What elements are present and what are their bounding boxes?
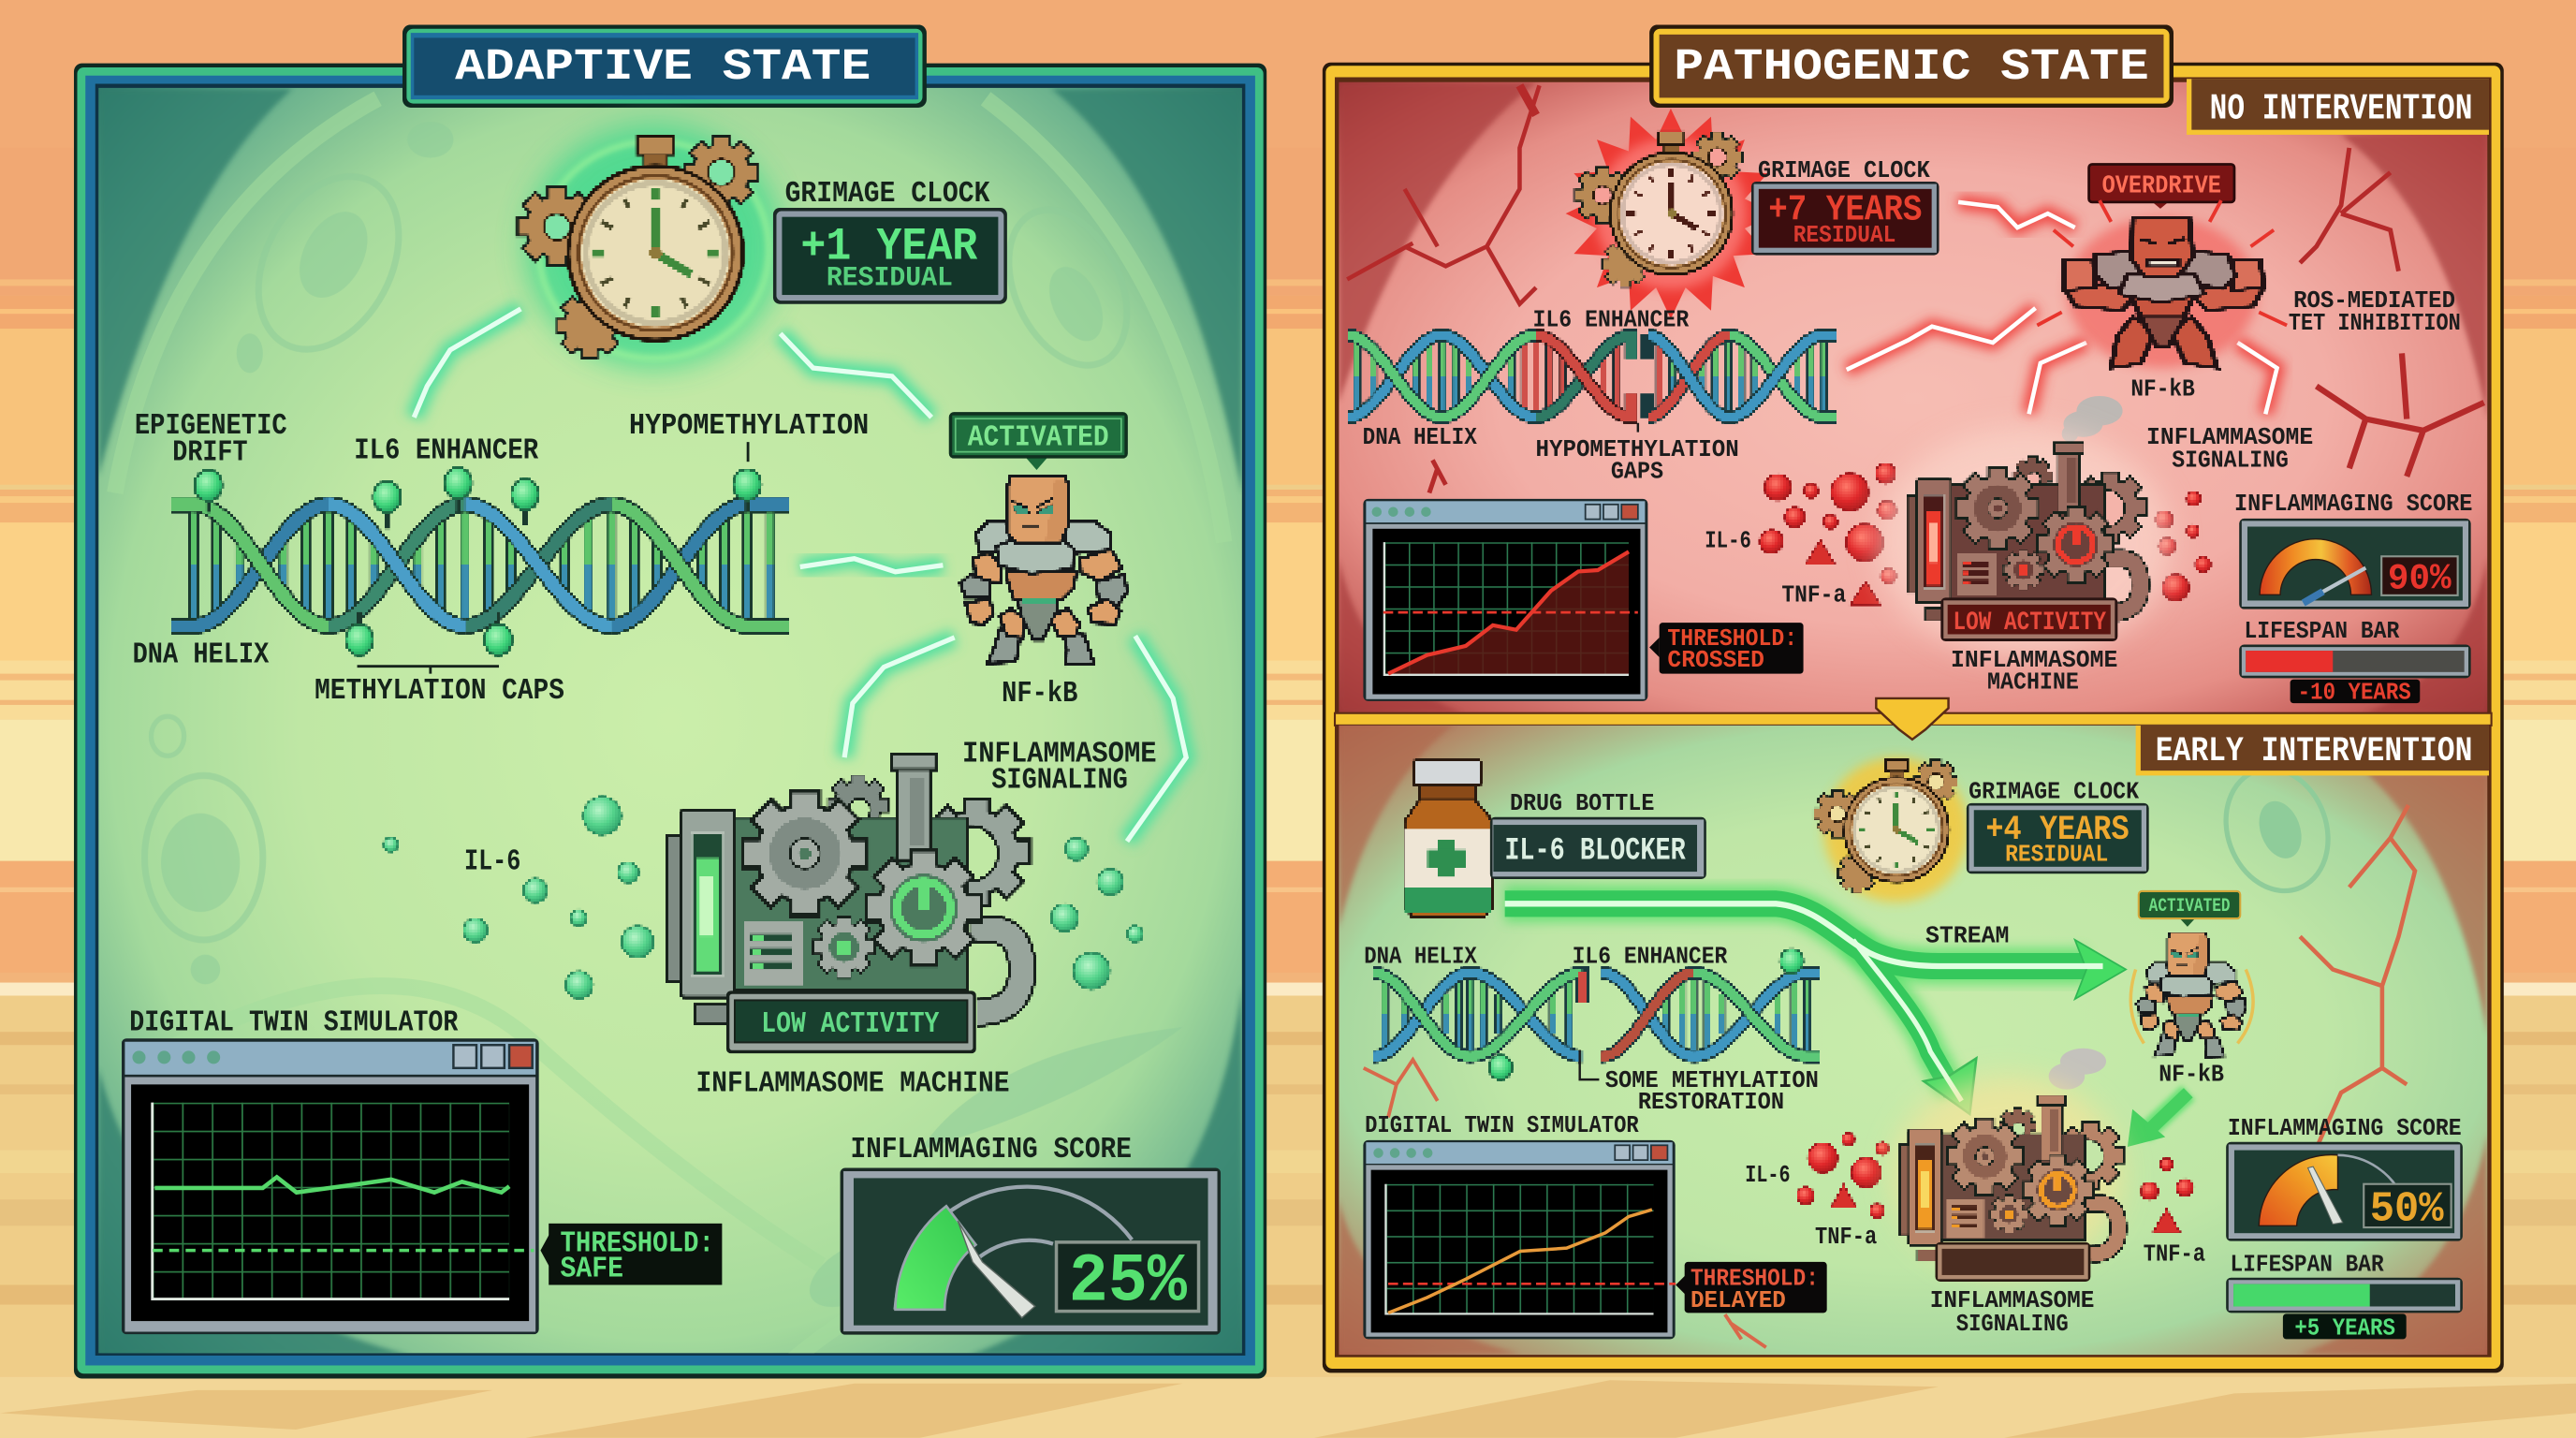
callout: overdrive <box>2089 165 2234 209</box>
chart: DNA helix with hypomethylation gap <box>1347 335 1837 418</box>
label: inflammasome signaling <box>1930 1286 2094 1338</box>
chart: DNA helix with partial restoration <box>1373 949 1821 1079</box>
callout: activated: ACTIVATED <box>968 422 1109 455</box>
callout: threshold delayed: THRESHOLD: <box>1690 1264 1819 1292</box>
label: TNF-a: TNF-a <box>1781 580 1846 609</box>
cytokines: red IL-6 and TNF-a particles <box>1760 463 2211 605</box>
labels: epigenetic drift: DRIFT <box>172 436 248 469</box>
label: some methylation restoration: RESTORATION <box>1638 1088 1784 1116</box>
background: membrane folds <box>98 89 1242 1364</box>
label: DNA helix: DNA HELIX <box>1363 423 1477 451</box>
panel frame <box>1323 63 2504 1372</box>
tab: no intervention: NO INTERVENTION <box>2210 88 2472 129</box>
label: IL-6: IL-6 <box>1705 526 1751 554</box>
label: ROS-mediated TET inhibition <box>2289 286 2461 337</box>
gauge: inflammaging score 90%: 90% <box>2388 558 2452 599</box>
callout: activated <box>2139 891 2240 927</box>
badge: +1 year residual <box>773 208 1007 304</box>
divider <box>1335 713 2492 726</box>
tab: early intervention: EARLY INTERVENTION <box>2156 732 2472 771</box>
machine: inflammasome overactive <box>1876 427 2172 657</box>
callout: threshold delayed: DELAYED <box>1690 1286 1786 1314</box>
callout: threshold crossed: CROSSED <box>1667 646 1764 674</box>
status plate: low activity: LOW ACTIVITY <box>761 1008 940 1041</box>
label: inflammasome signaling: SIGNALING <box>991 765 1128 798</box>
callout: plus 5 years: +5 YEARS <box>2294 1314 2395 1343</box>
label: inflammasome signaling <box>2146 423 2313 474</box>
label: DNA helix: DNA HELIX <box>133 638 269 671</box>
bar: lifespan minus 10 years <box>2239 645 2471 678</box>
label: DNA helix: DNA HELIX <box>1364 942 1477 970</box>
sub-panel: early intervention <box>1339 725 2489 1355</box>
badge: +4 years residual: +4 YEARS <box>1985 811 2130 850</box>
badge: +7 years residual: RESIDUAL <box>1793 221 1895 249</box>
arrow: energy spark clock to NF-kB <box>781 333 931 418</box>
callout: threshold delayed <box>1676 1262 1827 1314</box>
icon: steam <box>2049 1049 2106 1090</box>
helix strands <box>1373 973 1821 1057</box>
status plate: low activity <box>726 990 976 1053</box>
callout: minus 10 years: -10 YEARS <box>2298 678 2411 706</box>
label: inflammaging score: INFLAMMAGING SCORE <box>2228 1114 2462 1142</box>
callout: activated <box>949 412 1128 470</box>
badge: IL-6 blocker: IL-6 BLOCKER <box>1504 833 1686 869</box>
arrow: drug stream to NF-kB and machine <box>1505 903 2126 1114</box>
tab: early intervention <box>2136 726 2489 775</box>
cytokines: green IL-6 particles <box>384 797 1143 998</box>
methylation caps <box>1489 949 1803 1079</box>
callout: threshold safe: THRESHOLD: <box>560 1228 714 1261</box>
gauge: inflammaging score 25%: 25% <box>1069 1243 1188 1321</box>
sub-panel background: inflamed tissue <box>1339 82 2487 713</box>
label: methylation caps: METHYLATION CAPS <box>315 675 564 708</box>
label: GrimAge clock: GRIMAGE CLOCK <box>1758 156 1930 184</box>
cytokines: reduced particles <box>1797 1133 2193 1232</box>
label: GrimAge clock: GRIMAGE CLOCK <box>785 178 989 211</box>
arrow: spark NF-kB to machine <box>2029 343 2086 414</box>
label: IL-6: IL-6 <box>464 845 520 878</box>
arrow: energy spark NF-kB to machine <box>844 638 955 757</box>
badge: +1 year residual: RESIDUAL <box>827 261 953 293</box>
label: TNF-a: TNF-a <box>2144 1240 2205 1269</box>
sub-panel: no intervention <box>1339 79 2489 713</box>
veins and cells <box>1364 755 2415 1347</box>
status plate: blank <box>1936 1242 2090 1282</box>
gauge: inflammaging score 50% <box>2226 1142 2463 1241</box>
icon: epigenetic clock <box>520 125 782 368</box>
sub-panel background: recovering tissue <box>1339 726 2487 1355</box>
label: TNF-a: TNF-a <box>1815 1223 1877 1251</box>
label: some methylation restoration: SOME METHYLATION <box>1605 1066 1819 1094</box>
gauge: inflammaging score 90% <box>2239 519 2471 609</box>
label: GrimAge clock: GRIMAGE CLOCK <box>1969 777 2139 805</box>
callout: threshold safe: SAFE <box>560 1254 623 1286</box>
arrow: spark clock to NF-kB <box>1958 202 2075 227</box>
helix strands: intact and broken <box>1347 335 1837 418</box>
helix front strands <box>171 505 788 626</box>
label: hypomethylation gaps <box>1535 423 1739 486</box>
label: inflammasome machine <box>1951 646 2117 696</box>
badge: +7 years residual <box>1751 182 1939 256</box>
background: tissue folds <box>1339 725 2487 1354</box>
badge: +1 year residual: +1 YEAR <box>800 220 978 272</box>
helix back strands <box>171 505 788 626</box>
arrow: spark inflammasome signaling <box>2237 343 2277 414</box>
panel background: cell interior <box>98 88 1242 1353</box>
status plate: low activity <box>1940 597 2117 641</box>
trend line: stable inflammation <box>154 1177 509 1193</box>
label: inflammaging score: INFLAMMAGING SCORE <box>2234 490 2472 518</box>
callout: activated: ACTIVATED <box>2149 896 2231 917</box>
label: digital twin simulator: DIGITAL TWIN SIMULATOR <box>1365 1111 1639 1139</box>
label: IL-6: IL-6 <box>1745 1161 1791 1189</box>
chart: digital twin window, safe <box>122 1038 539 1334</box>
label: inflammasome machine: INFLAMMASOME MACHINE <box>695 1067 1010 1100</box>
label: ROS-mediated TET inhibition: TET INHIBITION <box>2289 309 2461 337</box>
badge: +4 years residual: RESIDUAL <box>2005 841 2108 868</box>
machine: inflammasome low activity <box>667 755 1028 1053</box>
label: inflammasome signaling: INFLAMMASOME <box>1930 1286 2094 1314</box>
arrow: stream NF-kB to machine <box>2128 1093 2188 1147</box>
label: inflammasome signaling: INFLAMMASOME <box>962 738 1157 770</box>
trend line: delayed inflammation <box>1388 1210 1652 1313</box>
callout: threshold safe <box>540 1224 722 1286</box>
badge: +7 years residual: +7 YEARS <box>1768 190 1922 231</box>
callout: threshold crossed: THRESHOLD: <box>1667 624 1797 653</box>
trend line: rising inflammation <box>1388 551 1629 674</box>
label: NF-kB: NF-kB <box>1002 678 1077 711</box>
threshold line <box>1388 1283 1676 1284</box>
icon: slowed clock <box>1815 757 1969 902</box>
arrow: inflammasome signaling spark <box>1127 636 1186 842</box>
icon: accelerated clock <box>1566 109 1776 318</box>
labels: epigenetic drift: EPIGENETIC <box>135 410 287 443</box>
label: ROS-mediated TET inhibition: ROS-MEDIATED <box>2293 286 2455 315</box>
character: NF-kB overdrive <box>2037 200 2287 368</box>
label: inflammasome signaling: SIGNALING <box>1956 1310 2069 1338</box>
arrow: spark NF-kB to DNA <box>1847 308 2036 370</box>
machine: inflammasome slowed <box>1893 1077 2123 1282</box>
arrow: energy spark clock to DNA <box>414 309 520 418</box>
background cells <box>144 122 1183 1321</box>
label: inflammasome machine: INFLAMMASOME <box>1951 646 2117 674</box>
panel: pathogenic state <box>1323 24 2504 1372</box>
veins <box>1347 85 2484 493</box>
label: inflammaging score: INFLAMMAGING SCORE <box>850 1134 1132 1167</box>
banner: adaptive state: ADAPTIVE STATE <box>455 43 871 93</box>
arrow: progression marker <box>1876 698 1949 740</box>
gauge: inflammaging score 50%: 50% <box>2370 1184 2444 1233</box>
label: NF-kB: NF-kB <box>2130 374 2195 403</box>
gauge: inflammaging score 25% <box>841 1168 1221 1335</box>
label: inflammasome signaling: SIGNALING <box>2172 446 2289 474</box>
label: digital twin simulator: DIGITAL TWIN SIMULATOR <box>129 1006 458 1039</box>
chart: digital twin window, crossed <box>1363 499 1647 701</box>
callout: threshold crossed <box>1649 623 1804 674</box>
tab: no intervention <box>2187 79 2489 135</box>
callout: overdrive: OVERDRIVE <box>2102 171 2221 200</box>
label: hypomethylation gaps: GAPS <box>1611 458 1663 486</box>
label: IL6 enhancer: IL6 ENHANCER <box>1533 306 1689 334</box>
background: tissue folds <box>1339 82 2487 713</box>
chart: digital twin window, delayed <box>1363 1140 1676 1339</box>
label: inflammasome signaling: INFLAMMASOME <box>2146 423 2313 451</box>
label: inflammasome signaling <box>962 738 1157 798</box>
label: lifespan bar: LIFESPAN BAR <box>2244 617 2400 645</box>
label: IL6 enhancer: IL6 ENHANCER <box>1573 942 1727 970</box>
badge: +4 years residual <box>1967 803 2149 873</box>
label: stream: STREAM <box>1925 921 2009 949</box>
banner: adaptive state <box>402 24 927 108</box>
methylation caps <box>195 468 761 655</box>
bar: lifespan plus 5 years <box>2226 1278 2463 1313</box>
badge: IL-6 blocker <box>1490 817 1706 879</box>
threshold line <box>1383 611 1638 613</box>
panel frame <box>74 64 1266 1379</box>
threshold line <box>153 1250 534 1252</box>
icon: drug bottle <box>1405 760 1493 917</box>
label: hypomethylation gaps: HYPOMETHYLATION <box>1535 435 1739 463</box>
chart: DNA helix with methylation caps <box>171 468 788 655</box>
label: NF-kB: NF-kB <box>2159 1061 2224 1089</box>
label: drug bottle: DRUG BOTTLE <box>1510 789 1654 817</box>
label: hypomethylation: HYPOMETHYLATION <box>629 410 869 443</box>
character: NF-kB recovering <box>2130 932 2253 1057</box>
banner: pathogenic state: PATHOGENIC STATE <box>1674 43 2149 93</box>
status plate: low activity: LOW ACTIVITY <box>1953 609 2106 638</box>
banner: pathogenic state <box>1649 24 2174 108</box>
labels: epigenetic drift <box>135 410 287 469</box>
character: NF-kB <box>960 476 1127 665</box>
label: lifespan bar: LIFESPAN BAR <box>2231 1250 2384 1278</box>
label: some methylation restoration <box>1580 1050 1819 1116</box>
label: IL6 enhancer: IL6 ENHANCER <box>354 435 538 468</box>
arrow: energy spark DNA to NF-kB <box>800 559 943 572</box>
label: inflammasome machine: MACHINE <box>1987 668 2079 696</box>
icon: steam <box>2062 396 2123 442</box>
panel: adaptive state <box>74 24 1266 1379</box>
